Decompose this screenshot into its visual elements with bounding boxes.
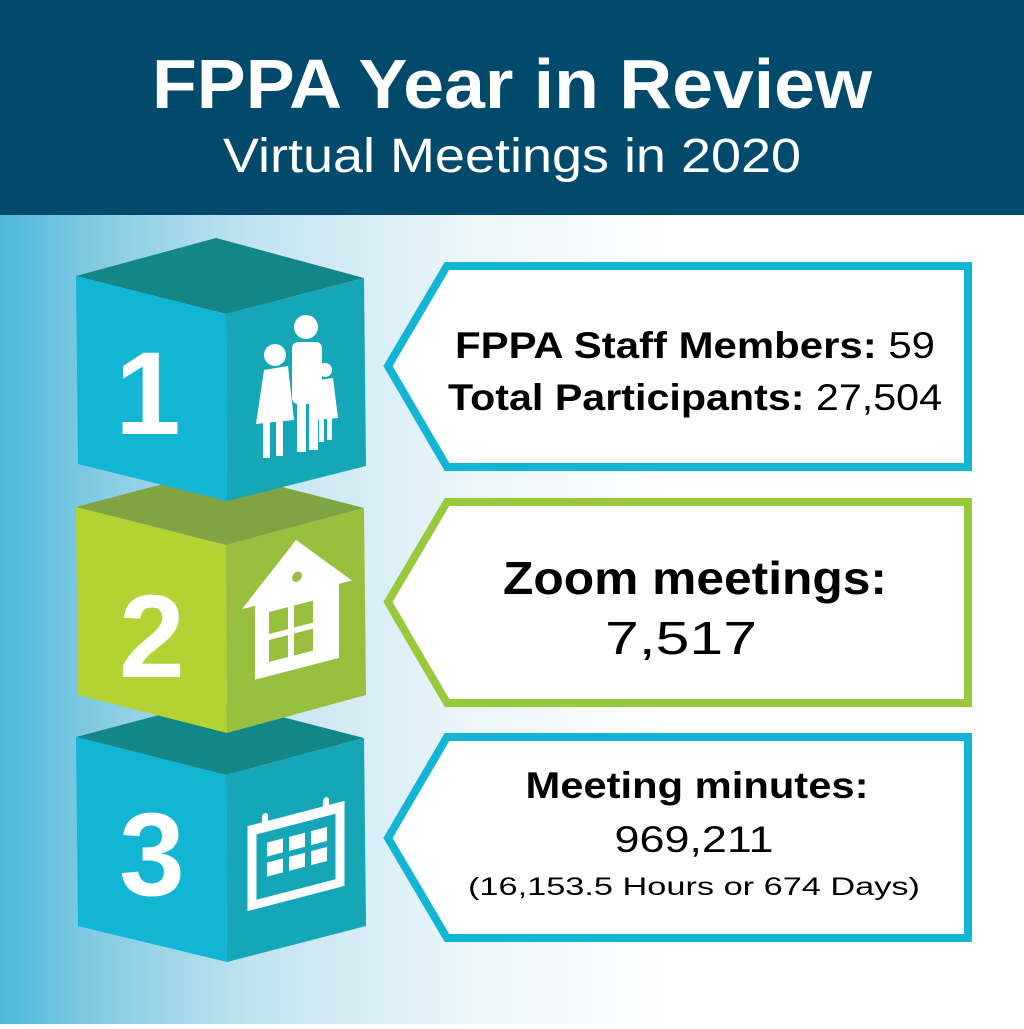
cube 2 [76, 470, 366, 733]
icon: house [242, 525, 352, 683]
callout 2 text: Zoom meetings: [503, 552, 887, 604]
icon: calendar [252, 794, 340, 905]
callout 2: 7,517 [605, 612, 757, 664]
subtitle: Virtual Meetings in 2020 [223, 130, 801, 183]
callout 2 [388, 502, 968, 703]
icon: family [256, 315, 338, 458]
number 1: 1 [115, 328, 181, 460]
number 2: 2 [119, 571, 185, 703]
callout 3: (16,153.5 Hours or 674 Days) [468, 873, 920, 901]
title: FPPA Year in Review [152, 45, 873, 123]
callout 3 text: Meeting minutes: [526, 765, 868, 806]
callout 3 [388, 737, 968, 938]
callout 3: 969,211 [614, 819, 774, 860]
number 3: 3 [119, 789, 185, 921]
callout 1 text: FPPA Staff Members: 59 [455, 325, 935, 366]
cube 3 [76, 700, 366, 962]
cube 1 [76, 238, 366, 501]
callout 1: Total Participants: 27,504 [448, 377, 942, 418]
callout 1 [388, 266, 968, 467]
header banner [0, 0, 1024, 215]
